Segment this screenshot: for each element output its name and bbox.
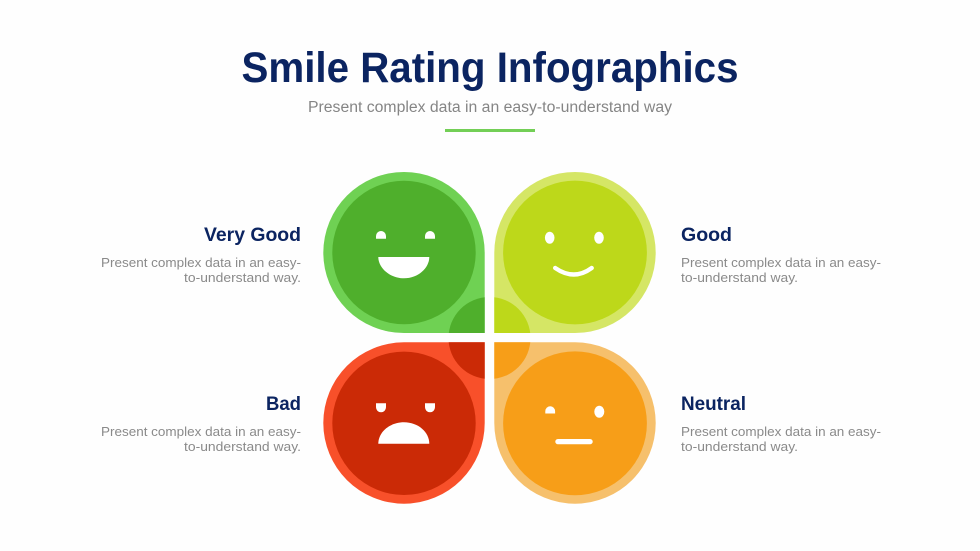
corner circle: neutral: [494, 342, 530, 379]
text block: very good: [101, 225, 301, 285]
inner circle: neutral: [503, 351, 647, 495]
petal: neutral: [494, 342, 656, 504]
panel: neutral: [494, 342, 656, 504]
panel: bad: [323, 342, 485, 504]
text block: good: [681, 225, 881, 285]
petal: very good: [323, 172, 485, 333]
text block: neutral: [681, 394, 881, 454]
corner circle: very good: [448, 297, 485, 333]
inner circle: good: [503, 181, 647, 324]
inner circle: bad: [332, 352, 476, 495]
text block: neutral: to-understand way.: [681, 439, 798, 454]
icon: good face: [545, 232, 604, 274]
text block: bad: to-understand way.: [184, 439, 301, 454]
text block: neutral: Present complex data in an easy-: [681, 424, 881, 439]
text block: neutral: Neutral: [681, 394, 746, 415]
text block: bad: Present complex data in an easy-: [101, 424, 301, 439]
text block: very good: to-understand way.: [184, 270, 301, 285]
corner circle: good: [494, 297, 530, 333]
icon: bad face: [376, 403, 435, 444]
petal: good: [494, 172, 656, 333]
inner circle: very good: [332, 181, 476, 324]
text block: good: Present complex data in an easy-: [681, 255, 881, 270]
text block: good: Good: [681, 225, 732, 246]
icon: very good face: [376, 231, 435, 278]
title: Smile Rating Infographics: [242, 45, 738, 92]
icon: neutral face: [545, 406, 604, 444]
corner circle: bad: [448, 342, 485, 379]
title underline: [445, 129, 535, 132]
text block: very good: Present complex data in an easy-: [101, 255, 301, 270]
petal: bad: [323, 342, 485, 504]
subtitle: Present complex data in an easy-to-understand way: [308, 99, 672, 116]
text block: bad: [101, 394, 301, 454]
text block: good: to-understand way.: [681, 270, 798, 285]
panel: very good: [323, 172, 485, 333]
text block: bad: Bad: [266, 394, 301, 415]
panel: good: [494, 172, 656, 333]
text block: very good: Very Good: [204, 225, 301, 246]
